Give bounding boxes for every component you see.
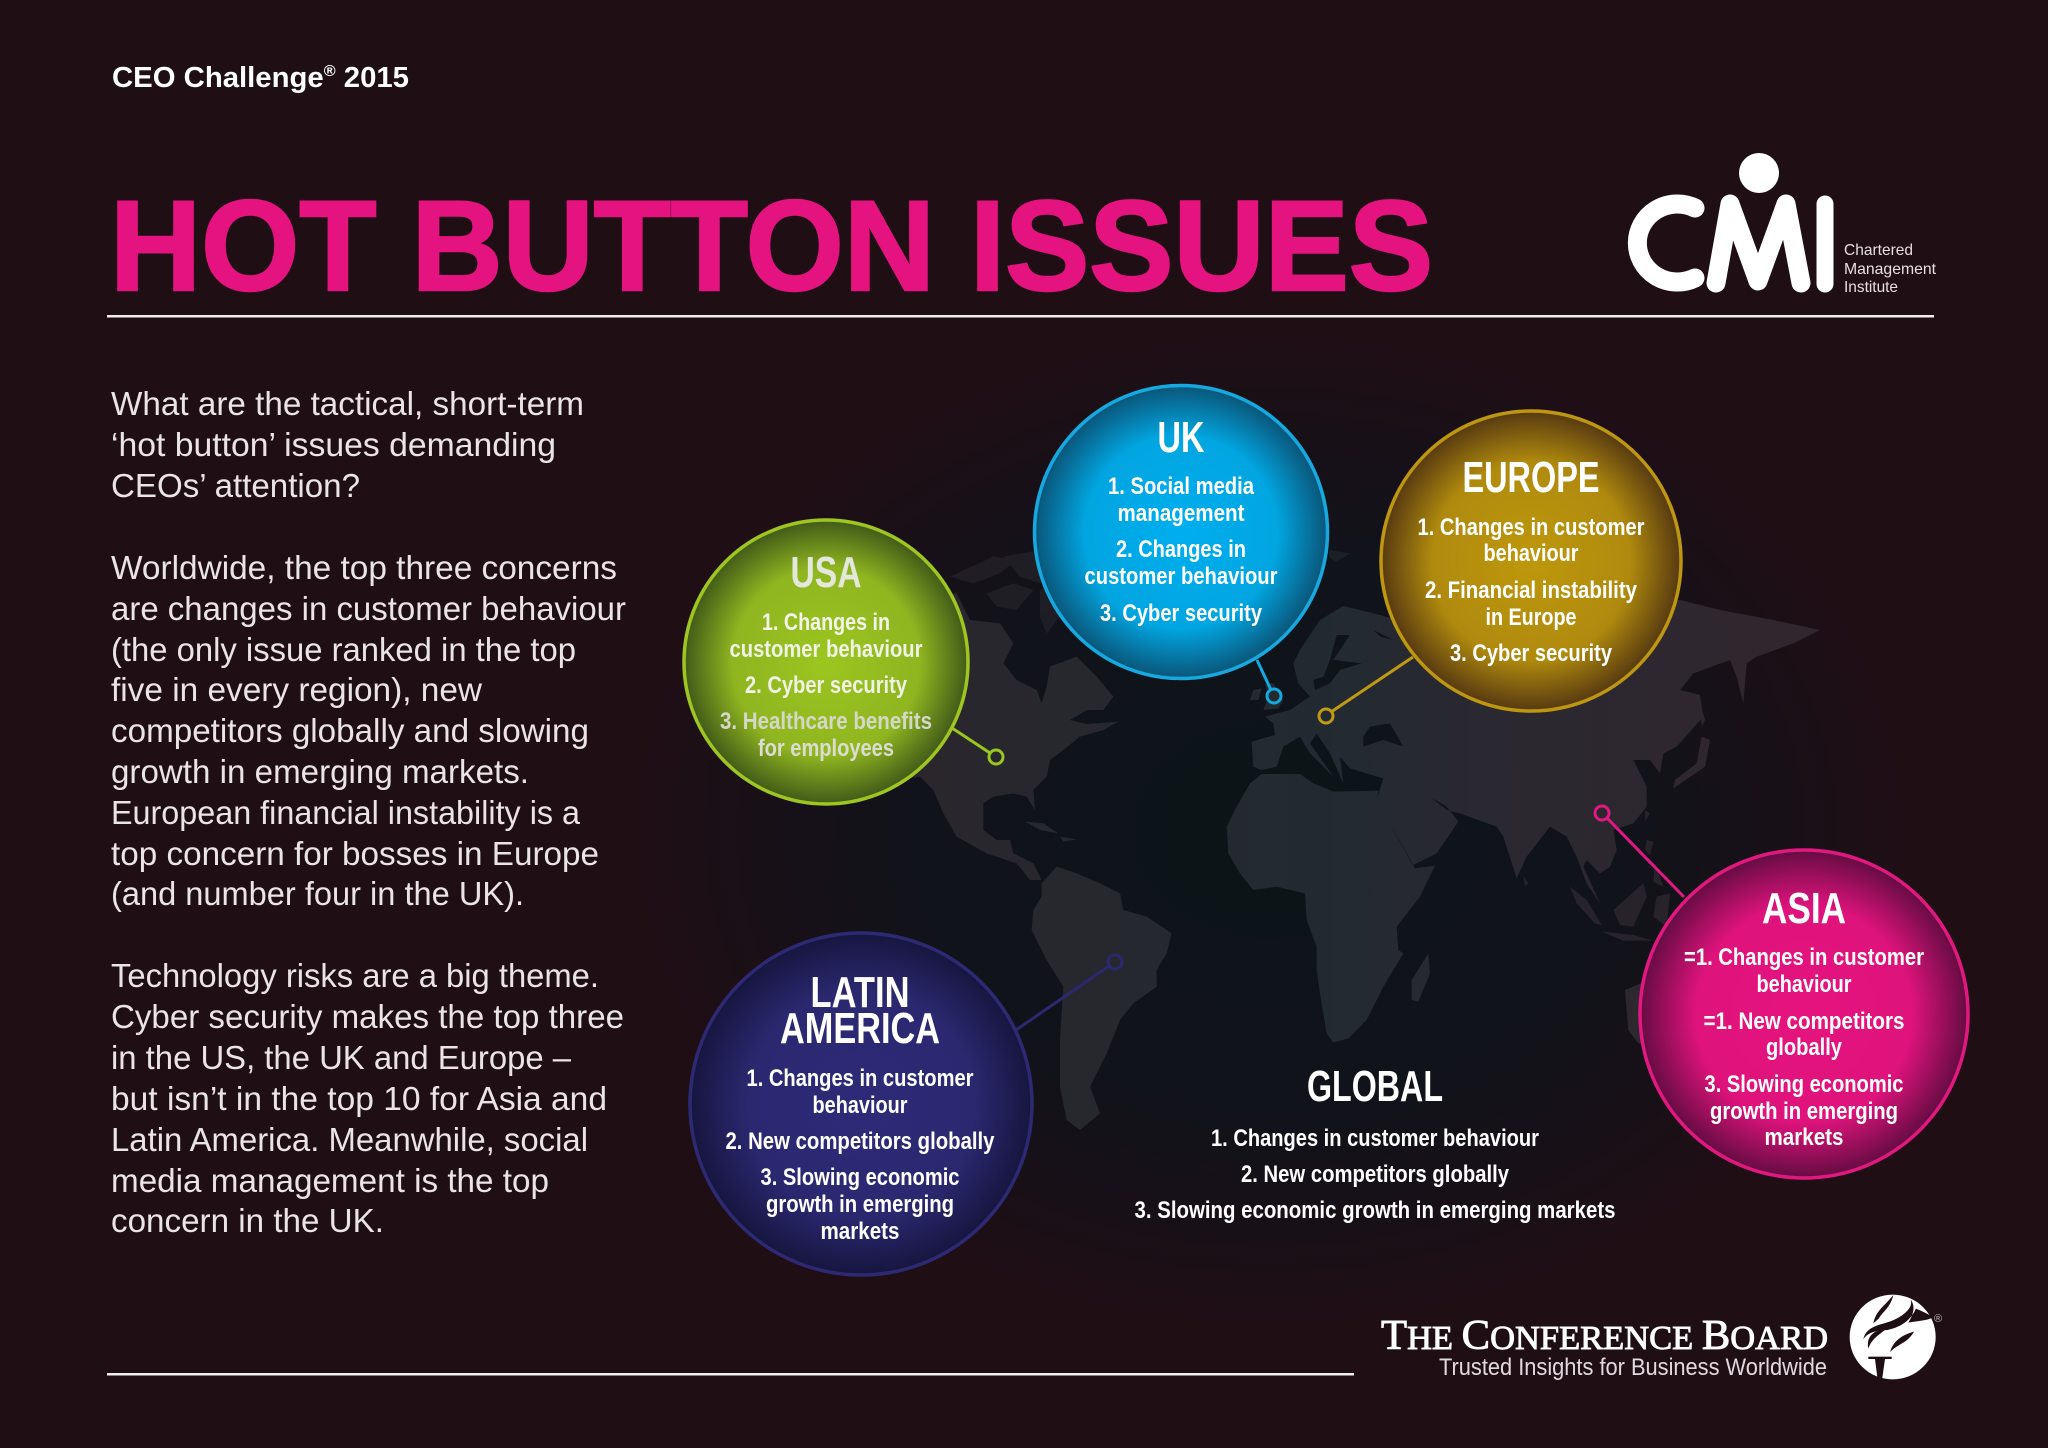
- list: USA: 2. Cyber security: [745, 672, 907, 699]
- connector: UK: [1257, 660, 1281, 703]
- intro text block: concern in the UK.: [111, 1203, 384, 1240]
- intro text block: growth in emerging markets.: [111, 754, 529, 791]
- intro text block: ‘hot button’ issues demanding: [111, 427, 556, 464]
- logo: CMI: [1637, 153, 1937, 296]
- map: Caribbean islands: [1025, 822, 1077, 842]
- list: Asia: behaviour: [1756, 971, 1852, 998]
- heading: USA: USA: [790, 548, 862, 597]
- list: Latin America: markets: [820, 1218, 900, 1245]
- icon: torch: [1850, 1295, 1936, 1380]
- list: UK: 3. Cyber security: [1100, 600, 1262, 627]
- heading: UK: UK: [1158, 413, 1205, 462]
- heading: Latin America: LATIN: [810, 968, 910, 1017]
- intro text block: media management is the top: [111, 1163, 549, 1200]
- logo dot: [1739, 153, 1779, 193]
- list: Europe: 1. Changes in customer: [1418, 514, 1645, 541]
- connector: Latin America: [1016, 955, 1122, 1030]
- heading: Latin America: [780, 968, 940, 1053]
- list: Asia: 3. Slowing economic: [1704, 1071, 1904, 1098]
- list: Europe: 3. Cyber security: [1450, 640, 1612, 667]
- list: Latin America: [726, 1065, 995, 1245]
- intro text block: in the US, the UK and Europe –: [111, 1040, 571, 1077]
- intro text block: are changes in customer behaviour: [111, 591, 626, 628]
- panel: UK: [1034, 386, 1328, 703]
- list: Latin America: growth in emerging: [766, 1191, 954, 1218]
- list: Asia: growth in emerging: [1710, 1098, 1898, 1125]
- map: Arctic islands and Greenland: [950, 550, 1350, 633]
- map: Japan and Sakhalin: [1673, 697, 1710, 788]
- panel: Global: [1134, 1062, 1616, 1224]
- intro text block: Cyber security makes the top three: [111, 999, 624, 1036]
- heading: Global: GLOBAL: [1307, 1062, 1443, 1111]
- list: UK: management: [1118, 500, 1244, 527]
- logo wordmark: Institute: [1844, 279, 1898, 296]
- intro text block: Latin America. Meanwhile, social: [111, 1122, 588, 1159]
- header: CEO Challenge 2015: ®: [324, 63, 336, 80]
- list: Asia: globally: [1766, 1034, 1842, 1061]
- intro text block: top concern for bosses in Europe: [111, 836, 599, 873]
- wordmark: THE CONFERENCE BOARD: [1381, 1313, 1828, 1359]
- list: Asia: markets: [1764, 1124, 1844, 1151]
- map: North America: [860, 593, 1118, 880]
- list: Asia: =1. New competitors: [1704, 1008, 1904, 1035]
- intro text block: but isn’t in the top 10 for Asia and: [111, 1081, 607, 1118]
- list: Global: 1. Changes in customer behaviour: [1211, 1125, 1539, 1152]
- list: USA: for employees: [758, 735, 894, 762]
- list: Asia: =1. Changes in customer: [1684, 944, 1924, 971]
- title: HOT BUTTON ISSUES: [110, 175, 1433, 318]
- intro text block: five in every region), new: [111, 672, 483, 709]
- list: UK: 1. Social media: [1108, 473, 1254, 500]
- list: UK: customer behaviour: [1084, 563, 1278, 590]
- list: Europe: behaviour: [1484, 540, 1579, 567]
- list: Global: 3. Slowing economic growth in emerging markets: [1134, 1197, 1616, 1224]
- list: USA: 1. Changes in: [762, 609, 890, 636]
- intro text block: Technology risks are a big theme.: [111, 958, 599, 995]
- registered mark: ®: [1934, 1313, 1942, 1325]
- list: Latin America: 2. New competitors globally: [726, 1128, 995, 1155]
- bubble: Europe: [1381, 411, 1681, 711]
- heading: Asia: ASIA: [1762, 884, 1846, 933]
- intro text block: CEOs’ attention?: [111, 468, 360, 505]
- list: Latin America: behaviour: [812, 1092, 908, 1119]
- panel: USA: [684, 520, 1003, 804]
- intro text block: What are the tactical, short-term: [111, 386, 584, 423]
- list: Europe: in Europe: [1486, 604, 1576, 631]
- list: Asia: [1684, 944, 1924, 1151]
- list: Latin America: 1. Changes in customer: [746, 1065, 974, 1092]
- panel: Asia: [1595, 806, 1968, 1178]
- logo wordmark: [1844, 242, 1937, 296]
- map: Australia: [1625, 973, 1720, 1043]
- logo wordmark: Management: [1844, 261, 1937, 278]
- intro text block: [111, 386, 626, 1240]
- bubble: USA: [684, 520, 968, 804]
- list: Global: 2. New competitors globally: [1241, 1161, 1509, 1188]
- bubble: Latin America: [690, 933, 1032, 1275]
- connector: USA: [952, 728, 1003, 764]
- header: CEO Challenge 2015: CEO Challenge: [112, 62, 322, 94]
- map: South America: [1032, 867, 1172, 1130]
- panel: Latin America: [690, 933, 1122, 1275]
- heading: Europe: EUROPE: [1462, 453, 1600, 502]
- intro text block: (the only issue ranked in the top: [111, 632, 576, 669]
- panel: Europe: [1319, 411, 1681, 723]
- tagline: Trusted Insights for Business Worldwide: [1439, 1354, 1827, 1381]
- list: Europe: 2. Financial instability: [1425, 577, 1637, 604]
- header: CEO Challenge 2015: 2015: [336, 62, 409, 94]
- map: Eurasia: [1252, 600, 1820, 903]
- intro text block: (and number four in the UK).: [111, 876, 524, 913]
- intro text block: competitors globally and slowing: [111, 713, 589, 750]
- list: Global: [1134, 1125, 1616, 1224]
- intro text block: European financial instability is a: [111, 795, 580, 832]
- connector: Asia: [1595, 806, 1684, 897]
- list: USA: customer behaviour: [730, 636, 923, 663]
- heading: Latin America: AMERICA: [780, 1004, 940, 1053]
- list: Europe: [1418, 514, 1645, 667]
- list: USA: [720, 609, 932, 762]
- world map: [860, 550, 1820, 1130]
- intro text block: Worldwide, the top three concerns: [111, 550, 617, 587]
- logo: The Conference Board: [1381, 1295, 1942, 1381]
- map: Britain and Ireland: [1250, 683, 1283, 710]
- bubble: Asia: [1640, 850, 1968, 1178]
- logo wordmark: Chartered: [1844, 242, 1913, 259]
- list: UK: 2. Changes in: [1116, 536, 1246, 563]
- list: UK: [1084, 473, 1278, 627]
- connector: Europe: [1319, 657, 1413, 723]
- map: Southeast Asia islands: [1523, 810, 1670, 941]
- map: Madagascar: [1412, 953, 1430, 1002]
- map: Africa: [1227, 774, 1435, 1043]
- bubble: UK: [1034, 386, 1328, 678]
- list: USA: 3. Healthcare benefits: [720, 708, 932, 735]
- list: Latin America: 3. Slowing economic: [760, 1164, 960, 1191]
- logo letters: [1637, 204, 1825, 284]
